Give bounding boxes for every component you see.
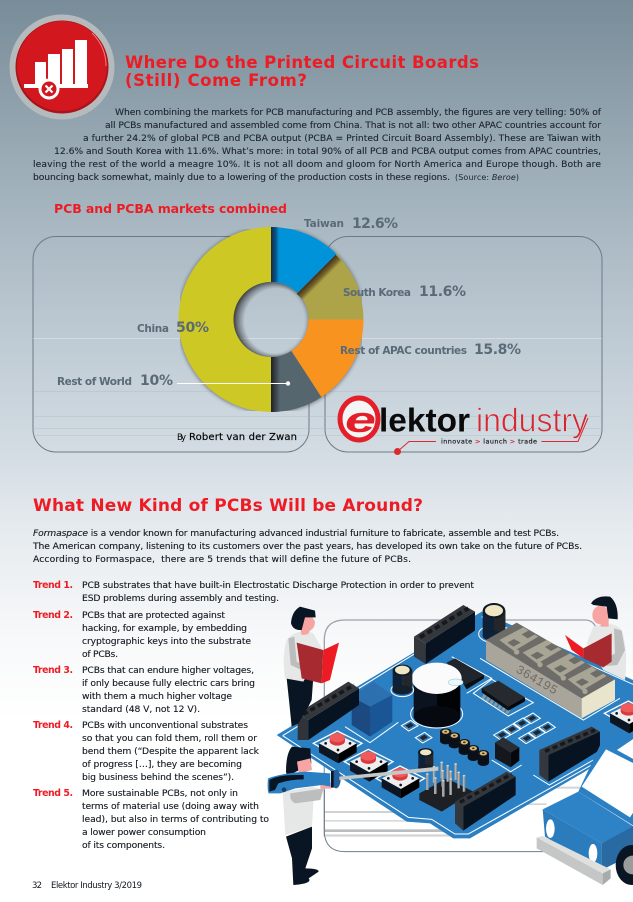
trend 5: lead), but also in terms of contributing to — [82, 814, 269, 825]
trend 1: Trend 1. — [33, 580, 73, 591]
label: Taiwan: Taiwan — [304, 218, 344, 230]
logo: elektor industry: e — [345, 399, 376, 440]
section intro text — [32, 528, 582, 565]
intro text block: leaving the rest of the world a meagre 10%. It is not all doom and gloom for North America and Europe though. Both are — [33, 159, 601, 170]
trend 4: bend them (“Despite the apparent lack — [82, 746, 260, 757]
header strip: left — [298, 682, 359, 740]
trend 5 — [33, 788, 269, 851]
trend 3: with them a much higher voltage — [82, 691, 232, 702]
small surface mount parts — [401, 713, 555, 744]
relay block — [345, 682, 398, 743]
trend 4: big business behind the scenes”). — [82, 772, 234, 783]
header strip: right — [533, 727, 600, 785]
trend 5: terms of material use (doing away with — [82, 801, 259, 812]
trend 2: hacking, for example, by embedding — [82, 623, 247, 634]
footer page number: 32 — [32, 881, 42, 891]
person: with screwdriver — [268, 747, 438, 885]
segment: Rest of World 10% — [271, 351, 321, 412]
capacitor: top — [479, 603, 509, 643]
intro text block: (Source: Beroe) — [455, 173, 519, 182]
trend 4: PCBs with unconventional substrates — [82, 720, 248, 731]
person: right, reading a red book — [565, 596, 626, 680]
logo: elektor industry: innovate > launch > trade — [441, 438, 537, 446]
illustration frame — [324, 620, 596, 852]
label: Rest of World — [57, 373, 173, 389]
label: Rest of APAC countries — [340, 342, 521, 358]
car — [537, 742, 633, 885]
person: left, reading a red book — [284, 607, 339, 727]
trend 4: Trend 4. — [33, 720, 73, 731]
trend 3 — [33, 665, 255, 715]
trend 5: a lower power consumption — [82, 827, 206, 838]
panel: right rounded frame — [325, 236, 602, 452]
donut chart — [178, 227, 364, 412]
trend 5: More sustainable PCBs, not only in — [82, 788, 238, 799]
panel: left rounded frame — [33, 236, 309, 452]
section intro text: Formaspace is a vendor known for manufacturing advanced industrial furniture to fabricate, assemble and test PCBs. — [33, 528, 559, 539]
label: China: China — [137, 323, 169, 335]
push buttons — [313, 701, 633, 798]
label: Rest of APAC countries: 15.8% — [474, 342, 521, 358]
trend 2: of PCBs. — [82, 649, 118, 660]
trend 1 — [33, 580, 474, 604]
trend 2: cryptographic keys into the substrate — [82, 636, 251, 647]
trend 5: of its components. — [82, 840, 165, 851]
label: Rest of World: Rest of World — [57, 376, 132, 388]
trend 5: Trend 5. — [33, 788, 73, 799]
title: (Still) Come From? — [125, 71, 307, 90]
segment: Rest of APAC 15.8% — [291, 320, 364, 397]
trend 4 — [33, 720, 260, 783]
section intro text: The American company, listening to its customers over the past years, has developed its own take on the future of PCBs. — [32, 541, 582, 552]
intro text block — [33, 107, 602, 183]
intro text block: When combining the markets for PCB manufacturing and PCB assembly, the figures are very telling: 50% of — [115, 107, 602, 118]
illustration: PCB board with people and car — [268, 596, 633, 885]
trend 4: of progress […], they are becoming — [82, 759, 242, 770]
trend 4: so that you can fold them, roll them or — [82, 733, 257, 744]
chart heading: PCB and PCBA markets combined — [54, 201, 287, 216]
intro text block: 12.6% and South Korea with 11.6%. What’s more: in total 90% of all PCB and PCBA output comes from APAC countries, — [54, 146, 601, 157]
trend 3: PCBs that can endure higher voltages, — [82, 665, 254, 676]
label: South Korea — [343, 284, 466, 300]
footer page number: Elektor Industry 3/2019 — [51, 881, 142, 891]
header strip: top — [414, 605, 475, 664]
header strip: bottom — [455, 772, 516, 831]
chip: upper — [447, 657, 492, 693]
trend 3: standard (48 V, not 12 V). — [82, 704, 200, 715]
trend 3: if only because fully electric cars bring — [82, 678, 255, 689]
chip: lower — [473, 679, 533, 716]
section heading: What New Kind of PCBs Will be Around? — [33, 496, 423, 516]
capacitor: small left — [391, 665, 414, 697]
section intro text: According to Formaspace, there are 5 trends that will define the future of PCBs. — [33, 554, 411, 565]
title: Where Do the Printed Circuit Boards — [125, 53, 479, 72]
segment: South Korea 11.6% — [298, 254, 364, 320]
buzzer cylinder — [411, 663, 463, 728]
pin header cluster — [419, 761, 473, 812]
intro text block: a further 24.2% of global PCB and PCBA output (PCBA = Printed Circuit Board Assembly). These are Taiwan with — [83, 133, 601, 144]
label: South Korea: 11.6% — [419, 284, 466, 300]
trend 1: PCB substrates that have built-in Electrostatic Discharge Protection in order to prevent — [82, 580, 474, 591]
seven segment display — [480, 623, 620, 720]
leader line — [177, 381, 290, 386]
label: Taiwan — [304, 216, 398, 232]
capacitor: lower — [418, 748, 433, 771]
trend 2: Trend 2. — [33, 610, 73, 621]
label: South Korea: South Korea — [343, 287, 411, 299]
label: China: 50% — [176, 320, 209, 336]
segment: Taiwan 12.6% — [271, 227, 336, 293]
label: Rest of APAC countries: Rest of APAC countries — [340, 345, 467, 357]
trend 2: PCBs that are protected against — [82, 610, 225, 621]
logo: elektor industry: industry — [476, 402, 588, 438]
intro text block: bouncing back somewhat, mainly due to a lowering of the production costs in these regions. — [33, 172, 450, 183]
segment: China 50% — [178, 227, 271, 412]
display label: 364195 — [513, 662, 560, 698]
byline: By — [177, 433, 186, 443]
trend 1: ESD problems during assembly and testing. — [82, 593, 279, 604]
label: Rest of World: 10% — [140, 373, 173, 389]
square black chip — [492, 737, 522, 772]
trend 2 — [33, 610, 251, 660]
intro text block: all PCBs manufactured and assembled come from China. That is not all: two other APAC countries account for — [105, 120, 601, 131]
trend 3: Trend 3. — [33, 665, 73, 676]
logo: elektor industry: lektor — [379, 402, 470, 438]
title — [125, 53, 479, 90]
circuit board — [277, 612, 633, 838]
logo: elektor industry — [340, 398, 588, 455]
label: Taiwan: 12.6% — [352, 216, 398, 232]
byline: Robert van der Zwan — [189, 432, 297, 443]
gold socket pins — [440, 728, 489, 766]
icon: red bar chart badge — [10, 14, 114, 120]
label: China — [137, 320, 209, 336]
